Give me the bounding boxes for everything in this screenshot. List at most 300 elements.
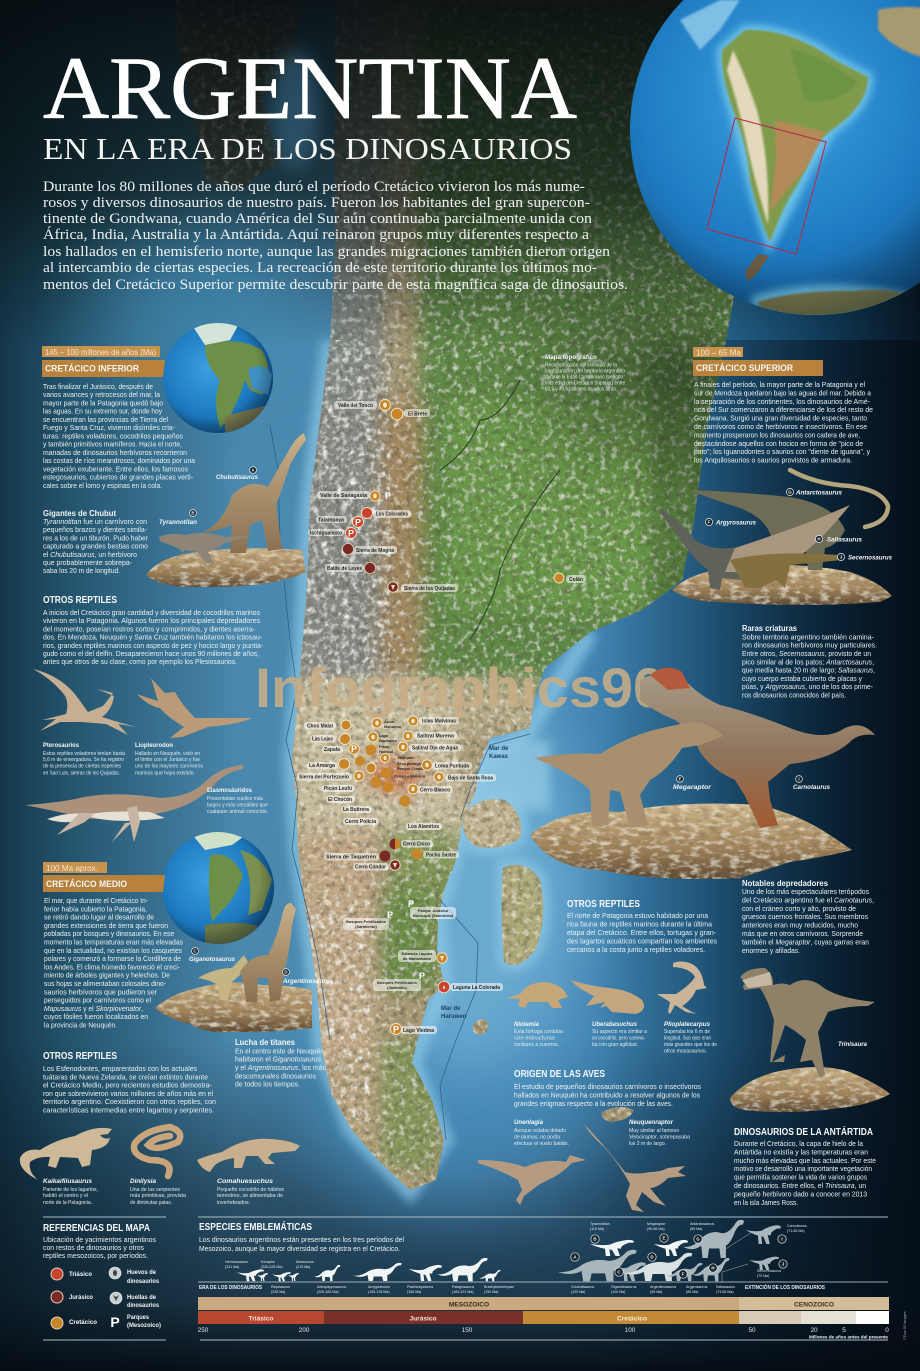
label: Uberabasuchus: ba con gran agilidad. [592, 1042, 638, 1048]
South America on globe [722, 30, 868, 242]
species names above the timeline: Secernosaurus [757, 1269, 781, 1273]
text block: vegetación exuberante. Entre ellos, los famosos [43, 464, 188, 474]
text block: notables depredadores: anteriores eran muy reducidos, mucho [742, 921, 858, 930]
period tag [43, 862, 107, 873]
species letters [571, 1234, 787, 1278]
species names below the axis: Brachytrachelopan [484, 1285, 514, 1289]
intro paragraph [43, 179, 628, 293]
label: Tyrannotitan: B [191, 511, 195, 516]
site: Loma Puntuda: Loma Puntuda [435, 764, 470, 770]
text block: vivieron en la Patagonia. Algunos fueron los principales depredadores [43, 616, 260, 625]
text block: gigantes de chubut: el Chubutisaurus, un herbívoro [43, 550, 137, 559]
species letters: G [696, 1237, 700, 1242]
site: Valle de Sanagasta: P [385, 491, 391, 501]
text block: etapa del Cretácico. Entre ellos, tortugas y gran- [567, 928, 717, 937]
site: Bosques Petrificados Sarmiento: (Sarmiento) [355, 924, 378, 929]
label: Liopleurodon: Liopleurodon [135, 742, 173, 749]
label: Uberabasuchus: un cocodrilo, pero camina- [592, 1036, 645, 1042]
heading: ESPECIES EMBLEMÁTICAS [199, 1220, 312, 1233]
site: Las Lajas: Las Lajas [312, 736, 333, 742]
callout: mapa topografico: durante la Edad Campaniano (período [545, 374, 623, 380]
site: Salitral Ojo de Agua [398, 742, 461, 752]
text block: mayor parte de la Patagonia quedó bajo [43, 398, 163, 408]
map location frame [707, 118, 826, 254]
site: Auca Mahuevo: Auca [384, 719, 394, 724]
text block [44, 896, 183, 1030]
label: Liopleurodon: marinos que haya existido. [135, 770, 195, 776]
illustration: Elasmosaurio [25, 765, 243, 842]
site: Parque Jurasico Municipal [408, 899, 456, 919]
site: Sierra de Taquetren [324, 850, 390, 862]
text block: antes que otros de su clase, como por ejemplo los Plesiosaurios. [43, 657, 237, 666]
illustration: Unenlagia [478, 1155, 586, 1205]
callout: mapa topografico: Reconstrucción aproximada de la [545, 362, 617, 368]
callout: mapa topografico: configuración del territorio argentino [545, 368, 625, 374]
site: Cerro Policia: Cerro Policía [345, 819, 377, 825]
label: Tyrannotitan [159, 510, 197, 526]
rivers and relief shadow [440, 310, 760, 640]
period heading bar: CRETÁCICO MEDIO [46, 878, 127, 889]
site: El Brete [391, 408, 430, 420]
illustration: Carnotaurus and Megaraptor on rock [530, 668, 875, 879]
legend: huellas: Huellas de [127, 1294, 156, 1301]
heading: OTROS REPTILES [43, 1050, 117, 1062]
text block: gudo como el del delfín. Desaparecieron hace unos 90 millones de años, [43, 649, 259, 658]
species names above the timeline: Mussaurus [296, 1260, 314, 1264]
site: Plaza Huincul: Huincul [379, 749, 393, 754]
text block: momento las temperaturas eran más elevadas [44, 938, 183, 946]
label: Liopleurodon [135, 742, 203, 776]
label: Liopleurodon: el límite con el Jurásico y fue [135, 757, 200, 763]
text block: ferior había cubierto la Patagonia, [44, 904, 147, 913]
callout: mapa topografico [545, 354, 625, 392]
label: Megaraptor: Megaraptor [673, 784, 711, 791]
axis numbers: 150 [462, 1327, 473, 1334]
text block: lucha de titanes: descomunales dinosaurios [235, 1071, 316, 1080]
site: Auca Mahuevo [372, 718, 401, 729]
label: Saltasaurus: H [817, 537, 821, 542]
species names below the axis: (73-65 Ma) [716, 1290, 734, 1294]
text block: gigantes de chubut: pequeños brazos y dientes simila- [43, 525, 148, 534]
text block: el Cretácico Medio, pero recientes estudios demostra- [43, 1081, 213, 1090]
label: Neuquenraptor: Neuquenraptor [629, 1119, 673, 1126]
label: Neuquenraptor [629, 1119, 690, 1147]
text block: raras criaturas: Entre otros, Secernosaurus, provisto de un [742, 649, 871, 658]
heading: REFERENCIAS DEL MAPA [43, 1222, 150, 1234]
label: Niolamia: Niolamia [514, 1021, 539, 1028]
text block: se encuentran las provincias de Tierra del [43, 415, 168, 424]
axis numbers: 0 [885, 1327, 889, 1334]
heading: DINOSAURIOS DE LA ANTÁRTIDA [734, 1125, 873, 1138]
site: Bosques Petrificados Sarmiento: Bosques Petrificados [346, 919, 386, 924]
site: Talampaya [316, 516, 364, 528]
species letters: E [663, 1236, 666, 1241]
species names above the timeline: (80 Ma) [690, 1227, 702, 1231]
site: Cerro Condor [353, 860, 400, 870]
label: Liopleurodon: uno de los mayores carnívoros [135, 763, 203, 769]
site: El Chocon: El Chocón [328, 797, 352, 803]
text block: de dinosaurios. Entre ellos, el Trinisaura, un [734, 1181, 866, 1190]
label: Niolamia [514, 1021, 563, 1048]
legend: parques [110, 1314, 161, 1330]
era bar: Cenozoico: CENOZOICO [794, 1302, 834, 1308]
label: Comahuesuchus: Pequeño cocodrilo de hábitos [217, 1187, 284, 1193]
species names below the axis: Adeopapposaurus [317, 1285, 346, 1289]
label: Plioplatecarpus: Plioplatecarpus [664, 1021, 710, 1028]
site: Valle de Sanagasta [317, 491, 391, 501]
species names below the axis: Amygdalodon [368, 1285, 390, 1289]
label: Unenlagia: efectuar el vuelo batido. [514, 1141, 569, 1147]
text block: y también primitivos mamíferos. Hacia el norte, [43, 440, 182, 449]
text block: tuátaras de Nueva Zelanda, se creían extintos durante [43, 1072, 208, 1081]
text block: mucho más elevadas que las actuales. Por este [734, 1156, 876, 1165]
period bar: Cretacico: Cretácico [617, 1316, 647, 1322]
label: Chubutisaurus [216, 467, 258, 481]
intro paragraph: mentos del Cretácico Superior permite descubrir parte de esta magnífica saga de dinosaurios. [43, 277, 628, 293]
label: Argentinosaurus: D [284, 970, 288, 975]
label: Comahuesuchus: Comahuesuchus [217, 1178, 273, 1185]
site: Lago Viedma [390, 1024, 437, 1034]
site: Talampaya: P [355, 517, 361, 527]
label: Giganotosaurus [189, 948, 235, 963]
heading: OTROS REPTILES [43, 594, 117, 606]
label: Neuquenraptor: Muy similar al famoso [629, 1128, 679, 1134]
label: Kaikaifilusaurus [43, 1178, 98, 1206]
text block: lucha de titanes: En el centro este de Neuquén [235, 1046, 324, 1055]
text block [567, 911, 717, 954]
panel: cretacico superior [693, 347, 873, 465]
axis numbers: 100 [625, 1327, 636, 1334]
legend: huellas [110, 1292, 159, 1309]
site: Area protegida Parque Cretacico [355, 756, 430, 771]
text block: las costas de ríos meandrosos, dominados por una [43, 456, 196, 465]
label: Kaikaifilusaurus: habitó el centro y el [43, 1193, 88, 1199]
species names above the timeline: (231 Ma) [225, 1265, 239, 1269]
era bar: Cenozoico [739, 1297, 889, 1310]
panel: dinosaurios de la antartida [734, 1125, 876, 1207]
text block: la separación de los continentes, los dinosaurios de Amé- [694, 397, 871, 406]
site: Los Alamitos: Los Alamitos [408, 824, 439, 830]
coastal shelf [722, 30, 915, 330]
text block: notables depredadores: también el Megaraptor, cuyas garras eran [742, 937, 869, 946]
site: Sierra de Mogna [342, 544, 397, 554]
text block: raras criaturas: que medía hasta 20 m de largo; Saltasaurus, [742, 666, 875, 675]
Carnotaurus body [640, 674, 875, 828]
label: Elasmosauridos [207, 787, 268, 815]
subtitle: EN LA ERA DE LOS DINOSAURIOS [43, 131, 572, 166]
species names below the axis: Argentinosaurus [650, 1285, 676, 1289]
site: Lago Viedma: Lago Viedma [403, 1028, 435, 1034]
text block: sur de Mendoza quedaron bajo las aguas del mar. Debido a [694, 388, 872, 397]
text block: varios avances y retrocesos del mar, la [43, 390, 161, 399]
site: Ischigualasto: Ischigualasto [310, 530, 343, 536]
text block: raras criaturas [742, 623, 877, 700]
period heading bar [42, 360, 165, 377]
period tag: 100 – 65 Ma [696, 348, 741, 358]
period bar: Cretacico [523, 1311, 739, 1324]
text block: Los Esfenodontes, emparentados con los actuales [43, 1064, 197, 1073]
label: Comahuesuchus: invertebrados. [217, 1200, 250, 1206]
text block: los Andes. El clima húmedo favoreció el creci- [44, 962, 181, 971]
label: Antarctosaurus [786, 488, 842, 496]
label: Pterosaurios: de la presencia de ciertas especies [43, 763, 121, 769]
site: Pocho Sastre: Pocho Sastre [426, 852, 456, 858]
label: Neuquenraptor: los 2 m de largo. [629, 1141, 666, 1147]
text block: grandes enigmas respecto a la evolución de las aves. [514, 1099, 673, 1108]
text block: raras criaturas: cuyo cuerpo estaba cubierto de placas y [742, 674, 862, 683]
legend: parques: (Mesozoico) [127, 1322, 161, 1329]
species letters: F [682, 1272, 685, 1277]
text block: con restos de dinosaurios y otros [43, 1243, 144, 1252]
illustration: Liopleurodon [137, 678, 252, 738]
text block: momento prosperaron los dinosaurios con cadera de ave, [694, 430, 860, 439]
text block: Mapusaurus y el Skorpiovenator, [44, 1004, 143, 1013]
panel: otros reptiles marinos [25, 594, 268, 842]
site: El Brete: El Brete [408, 412, 427, 418]
text block [734, 1139, 876, 1207]
site: Laguna La Colorada [438, 981, 503, 993]
legend: huevos: dinosaurios [127, 1278, 159, 1285]
illustration: Kaikaifilusaurus [20, 1128, 112, 1180]
site: La Amarga: La Amarga [309, 763, 336, 769]
axis numbers: 5 [842, 1327, 846, 1334]
sea label: Mar de Kawas [489, 746, 509, 760]
text block: raras criaturas: púas, y Argyrosaurus, uno de los dos prime- [742, 682, 874, 691]
text block [694, 380, 873, 465]
text block: reptiles mesozoicos, por períodos. [43, 1251, 148, 1260]
text block: gigantes de chubut: Tyrannotitan fue un carnívoro con [43, 517, 147, 526]
species names below the axis: Giganotosaurus [611, 1285, 637, 1289]
species names above the timeline: (230-225 Ma) [261, 1265, 283, 1269]
site: Parque Jurasico Municipal: Parque Jurásico [418, 908, 449, 913]
illustration: Chubutisaurus and Tyrannotitan on rock [146, 433, 306, 587]
intro paragraph: África, India, Australia y la Antártida. Aquí reinaron grupos muy diferentes respecto a [43, 226, 590, 243]
text block: Tras finalizar el Jurásico, después de [43, 382, 153, 391]
site: Laguna La Colorada: 8 [443, 985, 446, 990]
text block [43, 1235, 156, 1260]
label: Pterosaurios: Pterosaurios [43, 742, 79, 749]
map sites [297, 400, 586, 1034]
site: Pocho Sastre [412, 848, 459, 860]
label: Plioplatecarpus: más grandes que los de [664, 1042, 717, 1048]
text block [43, 382, 196, 490]
text block: lucha de titanes [235, 1037, 326, 1089]
period heading bar [43, 875, 165, 892]
text block: notables depredadores: enormes y afiladas. [742, 946, 800, 955]
text block: raras criaturas: Raras criaturas [742, 623, 797, 633]
panel: cretacico inferior [42, 346, 196, 575]
text block: El estudio de pequeños dinosaurios carnívoros o insectívoros [514, 1082, 701, 1091]
label: Elasmosauridos: largos y más versátiles que [207, 802, 268, 808]
label: Niolamia: con estructuras [514, 1036, 555, 1042]
species names below the axis: Piatnitzkysaurus [407, 1285, 433, 1289]
label: Argyrosaurus: Argyrosaurus [715, 520, 756, 526]
panel: cretacico medio [43, 862, 183, 1030]
site: Parque Jurasico Municipal: P [408, 899, 414, 909]
species names above the timeline: (115 Ma) [590, 1227, 604, 1231]
heading: OTROS REPTILES [567, 898, 640, 910]
label: Uberabasuchus: Uberabasuchus [592, 1021, 637, 1028]
site: Bosques Petrificados Sarmiento [343, 910, 393, 930]
legend: huellas: dinosaurios [127, 1302, 159, 1309]
text block: raras criaturas: pico similar al de los patos; Antarctosaurus, [742, 657, 874, 666]
label: Elasmosauridos: Presentaban cuellos más [207, 796, 263, 802]
species names below the axis: (150 Ma) [484, 1290, 498, 1294]
text block: pequeño herbívoro dado a conocer en 2013 [734, 1189, 867, 1198]
illustration: Niolamia [507, 982, 568, 1008]
species names below the axis: (200-183 Ma) [317, 1290, 339, 1294]
intro paragraph: rosos y diversos dinosaurios de nuestro país. Fueron los habitantes del gran supercon- [43, 195, 590, 211]
text block: Los dinosaurios argentinos están presentes en los tres períodos del [199, 1235, 404, 1244]
site: Lago Barreales: Lago [379, 733, 389, 738]
species names below the axis: (165 Ma) [407, 1290, 421, 1294]
top darkening over relief [0, 0, 920, 345]
text block: notables depredadores: Uno de los más espectaculares terópodos [742, 887, 869, 896]
site: Plaza Huincul [366, 744, 393, 755]
species letters: C [617, 1270, 621, 1275]
era captions: ERA DE LOS DINOSAURIOS [199, 1285, 263, 1291]
label: Megaraptor: E [679, 777, 682, 782]
text block: El norte de Patagonia estuvo habitado por una [567, 911, 709, 920]
site: Los Colorados: Los Colorados [376, 512, 408, 518]
label: Antarctosaurus: Antarctosaurus [795, 490, 842, 496]
silhouettes: Triasico and Jurasico species [237, 1258, 501, 1281]
species names below the axis: (100 Ma) [611, 1290, 625, 1294]
panel: referencias del mapa [43, 1222, 161, 1330]
label: Dinilysia: Dinilysia [130, 1178, 156, 1185]
label: Niolamia: similares a cuernos. [514, 1042, 559, 1048]
text block: rica fauna de reptiles marinos durante la última [567, 920, 713, 928]
label: Pterosaurios: 5,6 m de envergadura. Se ha registro [43, 757, 124, 763]
site: Zapala: P [351, 744, 357, 754]
period bar: Triasico [198, 1311, 324, 1324]
text block: sus hojas se alimentaban colosales dino- [44, 979, 167, 988]
heading: ORIGEN DE LAS AVES [514, 1068, 605, 1080]
species letters: A [573, 1255, 577, 1260]
text block: lucha de titanes: de todos los tiempos. [235, 1080, 300, 1089]
site: Zapala: Zapala [324, 747, 341, 753]
globe: present day Earth with map frame [630, 0, 920, 330]
label: Elasmosauridos: Elasmosáuridos [207, 787, 252, 794]
period bar: Jurasico [324, 1311, 523, 1324]
site: Parque Jurasico Municipal: Municipal (Sarmiento) [413, 913, 454, 918]
sea label: Mar de Kawas: Mar de [489, 746, 509, 752]
text block: rica del Sur comenzaron a diferenciarse de los del resto de [694, 405, 873, 414]
site: Chos Malal: Chos Malal [307, 724, 333, 730]
site: Colan [554, 573, 586, 583]
panel: cretacico medio globe [162, 832, 274, 948]
label: Saltasaurus [815, 535, 862, 544]
text block: pato"; los Iguanodontes o saurios con "diente de iguana", y [694, 447, 870, 456]
text block: gigantes de chubut: capturado a grandes bestias como [43, 542, 148, 551]
site: Colan: Colán [569, 577, 584, 583]
label: Argentinosaurus [282, 969, 333, 985]
site: Cerro La Bandera [380, 768, 426, 778]
legend: Jurasico: Jurásico [69, 1294, 93, 1301]
site: Estancia Laguna de Manantiales: Estancia Laguna [402, 951, 433, 956]
site: Ischigualasto: P [348, 528, 354, 538]
text block: cercanos a la costa junto a reptiles voladores. [567, 945, 705, 954]
site: Auca Mahuevo: Mahuevo [384, 724, 401, 729]
site: Valle del Tonco [334, 400, 390, 410]
site: Balde de Leyes: Balde de Leyes [327, 566, 362, 572]
label: Kaikaifilusaurus: Pariente de los lagartos, [43, 1187, 98, 1193]
illustration: Pterosaurio [33, 669, 136, 735]
label: Chubutisaurus: A [251, 468, 255, 473]
label: Plioplatecarpus: otros mosasaurios. [664, 1048, 707, 1054]
site: Neuquen: Neuquén [398, 755, 415, 760]
text block: El mar, que durante el Cretácico In- [44, 896, 149, 905]
species names above the timeline: (70 Ma) [757, 1274, 769, 1278]
label: Uberabasuchus [592, 1021, 647, 1048]
species names above the timeline: Antarctosaurus [690, 1222, 714, 1226]
text block: en la isla James Ross. [734, 1198, 798, 1207]
site: Islas Malvinas [408, 716, 459, 726]
species names above the timeline: Tyrannotitan [590, 1222, 610, 1226]
label: Carnotaurus: I [798, 777, 800, 782]
site: Islas Malvinas: Islas Malvinas [422, 718, 456, 724]
illustration: Plioplatecarpus [657, 962, 707, 1014]
legend: Triasico: Triásico [69, 1271, 92, 1278]
image credit: ©Duo 90 Images [903, 1311, 907, 1340]
label: Giganotosaurus: Giganotosaurus [189, 956, 235, 963]
intro paragraph: al intercambio de ciertas especies. La recreación de este territorio durante los últimos mo- [43, 260, 597, 276]
text block: del momento, poseían rostros cortos y comprimidos, y dientes aserra- [43, 624, 256, 633]
illustration: Giganotosaurus and Argentinosaurus on rock [155, 903, 333, 1032]
text block: notables depredadores: con el cráneo corto y alto, provisto de [742, 904, 856, 913]
species names below the axis: (85 Ma) [686, 1290, 698, 1294]
axis numbers: 200 [299, 1327, 310, 1334]
site: Cerro Chico: Cerro Chico [403, 842, 430, 848]
label: Dinilysia [130, 1178, 186, 1206]
site: Las Lajas [310, 734, 350, 744]
species names below the axis: Saltasaurus [716, 1285, 735, 1289]
species names below the axis [271, 1285, 735, 1294]
species names below the axis: (163-121 Ma) [452, 1290, 474, 1294]
text block: A inicios del Cretácico gran cantidad y diversidad de cocodrilos marinos [43, 608, 260, 617]
top ocean glow [100, 50, 319, 375]
text block: grandes extensiones de tierra que fueron [44, 921, 168, 930]
text block: la provincia de Neuquén. [44, 1020, 117, 1030]
era captions [199, 1283, 826, 1291]
map: ancient South America relief [176, 0, 734, 1190]
label: Unenlagia: de plumas, no podía [514, 1134, 560, 1140]
panel: cretacico inferior globe [163, 322, 273, 435]
text block: gigantes de chubut [43, 508, 149, 575]
text block: lucha de titanes: habitaron el Giganotosaurus [235, 1055, 321, 1064]
label: Secernosaurus: J [840, 555, 843, 560]
site: Cerro Condor: Cerro Cóndor [355, 864, 387, 870]
axis numbers: Millones de años antes del presente [809, 1334, 888, 1340]
site: Bajo de Santa Rosa [434, 772, 496, 782]
label: Unenlagia [514, 1119, 569, 1147]
text block: A finales del período, la mayor parte de la Patagonia y el [694, 380, 865, 389]
site: Cerro Blanco: Cerro Blanco [420, 788, 450, 794]
period heading bar [693, 360, 823, 376]
text block: perseguidos por carnívoros como el [44, 996, 151, 1005]
intro paragraph: tinente de Gondwana, cuando América del Sur aún continuaba parcialmente unida con [43, 211, 593, 227]
site: Valle del Tonco: Valle del Tonco [338, 403, 374, 409]
label: Secernosaurus [837, 553, 892, 562]
text block: notables depredadores: Notables depredadores [742, 878, 828, 888]
axis numbers: 250 [198, 1327, 209, 1334]
label: Dinilysia: más primitivas, provista [130, 1193, 186, 1199]
site: Salitral Ojo de Agua: Salitral Ojo de Agua [412, 746, 459, 752]
legend: parques: Parques [127, 1314, 149, 1321]
site: Sierra del Portezuelo: Sierra del Portezuelo [299, 774, 350, 780]
panel: otros reptiles del cretacico medio [20, 1050, 300, 1206]
label: Argyrosaurus [705, 518, 756, 526]
